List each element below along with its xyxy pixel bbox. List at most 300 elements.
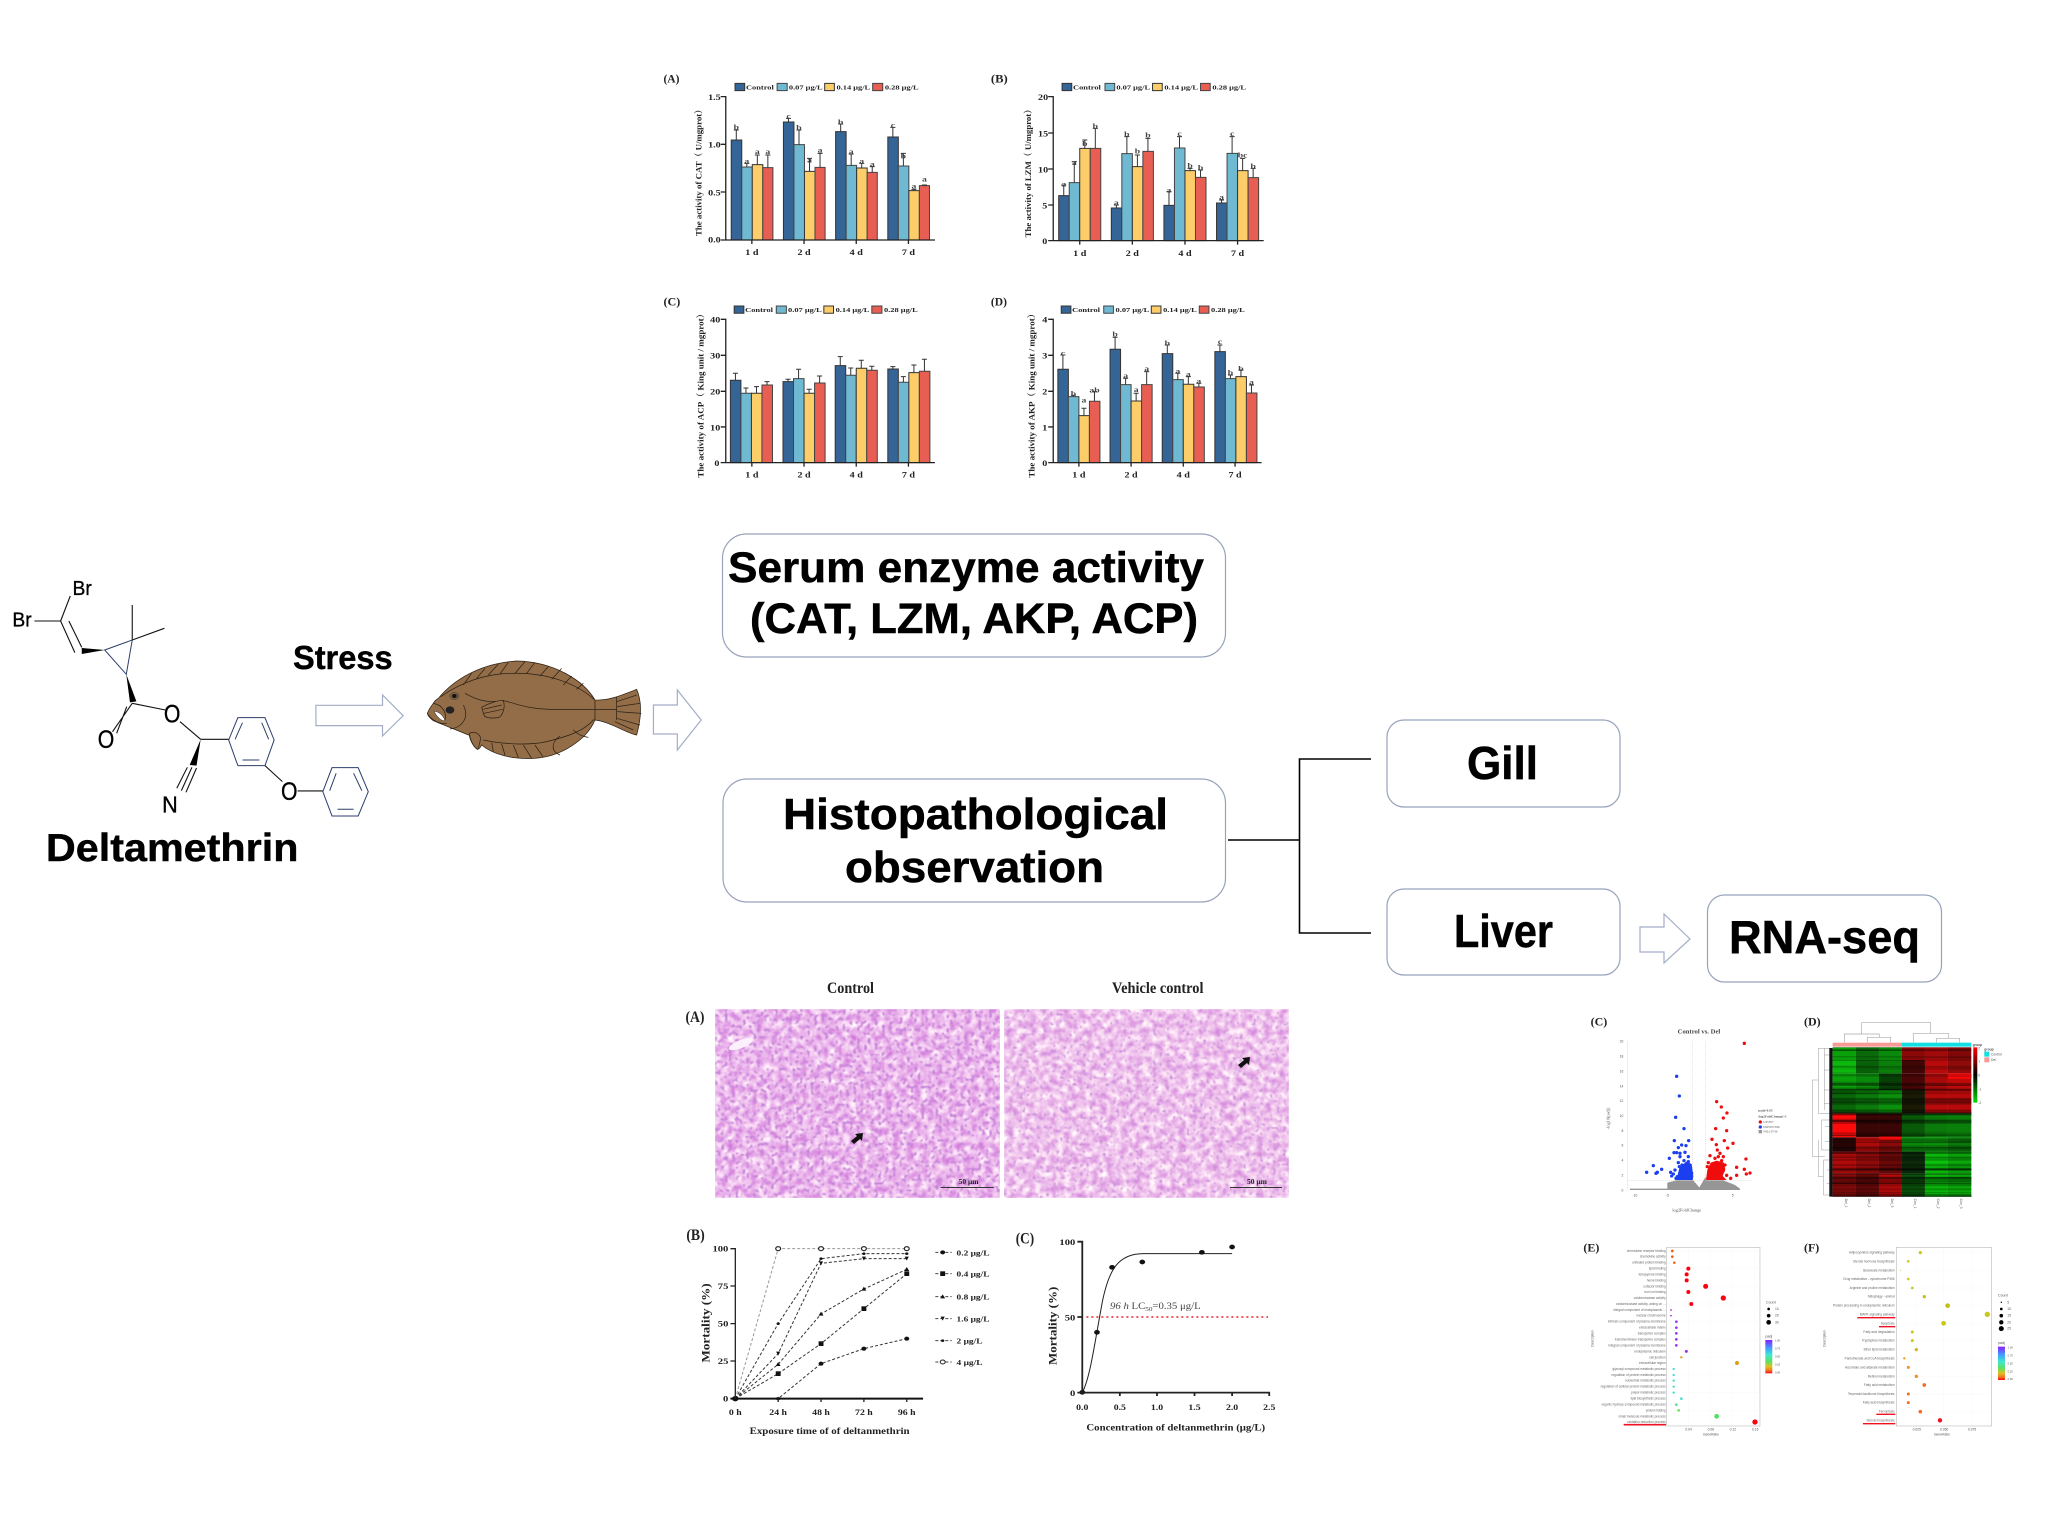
dot plot: KEGG enrichment: Steroid hormone biosynthesis <box>1853 1259 1895 1263</box>
bar chart: LZM activity: 4 d <box>1178 249 1192 258</box>
dot plot: KEGG enrichment: Butanoate metabolism <box>1863 1268 1895 1272</box>
bar chart: ACP activity: Control <box>745 306 773 314</box>
dot plot: GO enrichment: 0.00 <box>1775 1370 1781 1374</box>
dot plot: GO enrichment: 0.12 <box>1730 1427 1736 1431</box>
icon: deltamethrin chemical structure: O <box>164 700 180 728</box>
bar chart: CAT activity: b <box>796 123 802 132</box>
heading: vehicle control: Vehicle control <box>1112 980 1204 997</box>
bar chart: CAT activity: Control <box>746 83 774 91</box>
icon: flounder <box>427 661 641 758</box>
dose-response chart: LC50: 50 <box>1065 1313 1076 1323</box>
volcano plot: -5 <box>1666 1194 1669 1198</box>
bar chart: AKP activity: 7 d <box>1228 471 1242 479</box>
bar chart: CAT activity: a <box>818 146 823 154</box>
volcano plot: 12 <box>1620 1099 1623 1103</box>
bar chart: LZM activity: a <box>1061 180 1067 188</box>
dose-response chart: LC50: 96 h LC <box>1110 1302 1146 1312</box>
bar chart: LZM activity: 20 <box>1038 93 1049 102</box>
dot plot: KEGG enrichment: padj <box>1998 1341 2005 1345</box>
dot plot: GO enrichment: lipid binding <box>1649 1267 1666 1271</box>
dose-response chart: LC50: Mortality (%) <box>1048 1286 1060 1365</box>
heatmap: group <box>1973 1043 1982 1047</box>
bar chart: ACP activity: 30 <box>710 352 721 360</box>
dot plot: GO enrichment: oxidoreductase activity, acting on ... <box>1616 1302 1666 1306</box>
volcano plot: UP:307 <box>1763 1120 1774 1124</box>
dot plot: KEGG enrichment: Fatty acid metabolism <box>1864 1383 1895 1387</box>
dot plot: GO enrichment: 0.50 <box>1775 1355 1781 1359</box>
bar chart: CAT activity: c <box>891 121 895 129</box>
line chart: mortality over time: (B) <box>686 1227 705 1244</box>
panel letter A: (A) <box>686 1009 704 1026</box>
volcano plot: log2FoldChange <box>1672 1208 1701 1213</box>
micrograph: control: 50 μm <box>959 1177 979 1186</box>
bar chart: AKP activity: a <box>1123 371 1129 380</box>
dot plot: KEGG enrichment: 0.75 <box>2008 1354 2013 1358</box>
dot plot: GO enrichment: regulation of cellular protein metabolic process <box>1601 1385 1666 1389</box>
dot plot: KEGG enrichment: 15 <box>2007 1314 2011 1318</box>
bar chart: CAT activity: 1.0 <box>708 141 721 149</box>
dot plot: KEGG enrichment: (F) <box>1804 1241 1819 1255</box>
bar chart: LZM activity: 0.14 μg/L <box>1164 83 1198 91</box>
dot plot: KEGG enrichment: Adipocytokine signaling pathway <box>1849 1251 1895 1255</box>
panel: volcano plot and heatmap <box>1591 1014 2002 1213</box>
legend: concentrations: 2 μg/L <box>957 1336 983 1345</box>
dot plot: KEGG enrichment: Description <box>1823 1330 1827 1347</box>
arrow: fish to assays <box>653 690 701 750</box>
box: serum enzyme activity: (CAT, LZM, AKP, ACP) <box>750 595 1198 643</box>
dot plot: KEGG enrichment: Fatty acid biosynthesis <box>1863 1401 1895 1405</box>
dot plot: GO enrichment: intrinsic component of plasma membrane <box>1608 1320 1666 1324</box>
bar chart: CAT activity: a <box>755 147 760 156</box>
bar chart: AKP activity: (D) <box>991 296 1007 308</box>
bar chart: CAT activity: a <box>807 156 813 164</box>
bar chart: ACP activity: 10 <box>710 423 721 432</box>
bar chart: LZM activity: bc <box>1238 150 1248 159</box>
bar chart: LZM activity: The activity of LZM（ U/mgprot） <box>1023 105 1033 237</box>
bar chart: AKP activity: Control <box>1072 306 1100 314</box>
bar chart: AKP activity: a <box>1186 370 1191 378</box>
line chart: mortality over time: 72 h <box>855 1408 873 1417</box>
bar chart: CAT activity: c <box>786 112 791 120</box>
dot plot: GO enrichment: small molecule metabolic process <box>1618 1414 1666 1418</box>
volcano plot: 10 <box>1620 1114 1623 1118</box>
dot plot: GO enrichment: transporter complex <box>1638 1331 1666 1335</box>
dot plot: GO enrichment: extracellular matrix <box>1639 1326 1666 1330</box>
dose-response chart: LC50 <box>1016 1230 1276 1433</box>
dot plot: GO enrichment <box>1583 1241 1781 1436</box>
bar chart: LZM activity: c <box>1177 129 1182 138</box>
panel: mortality charts <box>686 1227 1276 1437</box>
bar chart: AKP activity: a <box>1249 377 1255 386</box>
bar chart: AKP activity: b <box>1071 389 1076 398</box>
dose-response chart: LC50: 0 <box>1070 1389 1076 1399</box>
heatmap: 0 <box>1978 1074 1980 1078</box>
legend: concentrations: 1.6 μg/L <box>957 1315 990 1323</box>
bar chart: ACP activity: 0.07 μg/L <box>788 306 822 314</box>
bar chart: ACP activity: 0.14 μg/L <box>836 306 869 314</box>
dot plot: KEGG enrichment: 20 <box>2007 1320 2011 1324</box>
bar chart: CAT activity: 1.5 <box>708 93 721 102</box>
dot plot: KEGG enrichment: 0.025 <box>1913 1427 1921 1431</box>
dot plot: GO enrichment: endoplasmic reticulum <box>1634 1349 1666 1353</box>
box: RNA-seq <box>1708 895 1942 982</box>
icon: deltamethrin chemical structure: Br <box>12 608 32 632</box>
panel: enrichment dot plots <box>1583 1241 2013 1436</box>
bar chart: CAT activity: 0.07 μg/L <box>789 83 823 91</box>
bar chart: ACP activity: 40 <box>710 316 721 324</box>
dot plot: KEGG enrichment: Steroid biosynthesis <box>1866 1418 1895 1422</box>
bar chart: AKP activity: ab <box>1089 385 1100 394</box>
bar chart: CAT activity: a <box>870 160 875 168</box>
dot plot: KEGG enrichment: 25 <box>2007 1327 2011 1331</box>
bar chart: LZM activity: 0.28 μg/L <box>1212 83 1246 91</box>
dose-response chart: LC50: 100 <box>1059 1238 1076 1248</box>
line chart: mortality over time: 48 h <box>812 1408 830 1417</box>
line chart: mortality over time: Mortality (%) <box>701 1283 713 1363</box>
dot plot: GO enrichment: Description <box>1590 1330 1594 1347</box>
bar chart: LZM activity: b <box>1187 161 1193 170</box>
bar chart: AKP activity: The activity of AKP（ King unit / mgprot） <box>1027 309 1037 478</box>
bar chart: LZM activity: b <box>1250 161 1256 170</box>
panel: liver histology micrographs <box>686 980 1289 1198</box>
bar chart: LZM activity: (B) <box>991 73 1008 85</box>
bar chart: AKP activity: a <box>1134 385 1139 394</box>
heatmap: 1 <box>1978 1060 1980 1064</box>
bar chart: LZM activity: 5 <box>1042 201 1048 210</box>
bar chart: ACP activity: 1 d <box>745 471 758 479</box>
bar chart: LZM activity: b <box>1082 139 1088 148</box>
dot plot: KEGG enrichment: 0.00 <box>2008 1377 2013 1381</box>
dot plot: GO enrichment: glycosyl compound metabolic process <box>1613 1367 1666 1371</box>
dot plot: KEGG enrichment: 0.50 <box>2008 1361 2013 1365</box>
dot plot: KEGG enrichment: Drug metabolism - cytochrome P450 <box>1843 1277 1895 1281</box>
line chart: mortality over time: 100 <box>712 1245 729 1254</box>
bar chart: AKP activity: c <box>1061 348 1065 357</box>
line chart: mortality over time: 0 <box>723 1394 729 1404</box>
heatmap: Del <box>1991 1058 1996 1062</box>
heatmap: Del_2 <box>1867 1199 1871 1207</box>
label: Deltamethrin: Deltamethrin <box>46 826 298 869</box>
dot plot: GO enrichment: tetrapyrrole binding <box>1639 1272 1666 1276</box>
legend: concentrations: 0.8 μg/L <box>957 1293 990 1301</box>
volcano plot: 6 <box>1621 1144 1623 1148</box>
volcano plot: 2 <box>1621 1174 1623 1178</box>
volcano plot: DOWN:399 <box>1763 1125 1780 1129</box>
dot plot: GO enrichment: chemokine activity <box>1640 1255 1666 1259</box>
bar chart: LZM activity: b <box>1198 163 1203 172</box>
dot plot: GO enrichment: chemokine receptor binding <box>1627 1249 1666 1253</box>
dose-response chart: LC50: =0.35 μg/L <box>1152 1302 1201 1312</box>
volcano plot: NO:10736 <box>1763 1130 1778 1134</box>
dose-response chart: LC50: 0.0 <box>1076 1403 1089 1412</box>
dot plot: KEGG enrichment: 0.075 <box>1968 1427 1976 1431</box>
heatmap: -2 <box>1978 1101 1981 1105</box>
icon: deltamethrin chemical structure: O <box>98 726 114 754</box>
bar chart: CAT activity: a <box>859 156 865 165</box>
bar chart: CAT activity: 1 d <box>745 248 758 257</box>
icon: deltamethrin chemical structure: O <box>281 778 298 806</box>
icon: deltamethrin chemical structure <box>12 577 368 817</box>
bar chart: LZM activity: Control <box>1073 83 1101 91</box>
bar chart: LZM activity: b <box>1124 130 1130 138</box>
bar chart: CAT activity: 0.28 μg/L <box>885 83 919 91</box>
bar chart: LZM activity: a <box>1219 192 1225 201</box>
heatmap <box>1804 1014 2002 1209</box>
dot plot: GO enrichment: lipid biosynthetic process <box>1631 1397 1666 1401</box>
dot plot: GO enrichment: transmembrane transporter complex <box>1615 1337 1666 1341</box>
bar chart: LZM activity: c <box>1230 129 1234 138</box>
box: serum enzyme activity <box>722 534 1226 657</box>
bar chart: AKP activity: 2 <box>1042 388 1048 396</box>
box: histopathological observation: observation <box>845 843 1104 892</box>
bar chart: AKP activity: 0.07 μg/L <box>1116 306 1149 314</box>
bar chart: LZM activity: 7 d <box>1231 249 1244 258</box>
dot plot: KEGG enrichment: MAPK signaling pathway <box>1860 1312 1895 1316</box>
bar chart: CAT activity: a <box>744 156 750 165</box>
dot plot: GO enrichment: nucleotide metabolic process <box>1625 1379 1666 1383</box>
dot plot: KEGG enrichment: Ascorbate and aldarate metabolism <box>1845 1365 1895 1369</box>
bar chart: LZM activity: 15 <box>1038 129 1049 138</box>
volcano plot: 8 <box>1621 1129 1623 1133</box>
bar chart: CAT activity: 0.0 <box>708 236 721 244</box>
volcano plot: -log10(padj) <box>1605 1107 1610 1129</box>
volcano plot: 16 <box>1620 1069 1623 1073</box>
dose-response chart: LC50: 1.5 <box>1188 1403 1201 1412</box>
legend: concentrations: 0.4 μg/L <box>957 1270 990 1278</box>
bar chart: LZM activity: a <box>1072 158 1077 167</box>
volcano plot: 0 <box>1621 1188 1623 1192</box>
line chart: mortality over time: 0 h <box>729 1408 742 1417</box>
bar chart: ACP activity: 20 <box>710 388 721 396</box>
dot plot: KEGG enrichment: Ether lipid metabolism <box>1864 1348 1895 1352</box>
bar chart: CAT activity: The activity of CAT（ U/mgprot） <box>694 105 704 236</box>
dose-response chart: LC50: 0.5 <box>1114 1403 1127 1412</box>
dot plot: GO enrichment: 0.25 <box>1775 1363 1781 1367</box>
bar chart: AKP activity: a <box>1175 366 1181 375</box>
dot plot: KEGG enrichment: Fatty acid degradation <box>1863 1330 1895 1334</box>
bar chart: LZM activity: b <box>1093 121 1098 130</box>
bar chart: LZM activity: b <box>1145 131 1151 139</box>
heatmap: Con_2 <box>1936 1199 1940 1209</box>
dot plot: GO enrichment: 20 <box>1775 1314 1779 1318</box>
bar chart: AKP activity: b <box>1112 330 1118 338</box>
bar chart: LZM activity: 1 d <box>1073 249 1086 258</box>
heatmap: 2 <box>1978 1046 1980 1050</box>
bar chart: CAT activity: a <box>765 147 771 156</box>
dot plot: GO enrichment: 30 <box>1775 1320 1779 1324</box>
dose-response chart: LC50: Concentration of deltanmethrin (μg/L) <box>1086 1423 1266 1433</box>
bar chart: AKP activity: b <box>1238 364 1244 373</box>
icon: deltamethrin chemical structure: N <box>162 792 178 817</box>
dot plot: GO enrichment: extracellular region <box>1639 1361 1666 1365</box>
dot plot: GO enrichment: Count <box>1766 1300 1776 1304</box>
box: liver: Liver <box>1454 905 1553 957</box>
box: gill: Gill <box>1467 737 1538 789</box>
bar chart: CAT activity <box>663 73 935 257</box>
heading: control: Control <box>827 980 874 997</box>
bar chart: AKP activity: a <box>1196 376 1202 385</box>
dot plot: KEGG enrichment: Terpenoid backbone biosynthesis <box>1848 1392 1895 1396</box>
bar chart: LZM activity: 10 <box>1038 165 1049 174</box>
bar chart: AKP activity: 2 d <box>1124 471 1138 479</box>
bar chart: LZM activity: a <box>1167 186 1172 194</box>
dot plot: KEGG enrichment: Mitophagy - animal <box>1868 1295 1895 1299</box>
bar chart: CAT activity: a <box>922 175 928 183</box>
bar chart: CAT activity: 0.14 μg/L <box>836 83 870 91</box>
heatmap: Del_3 <box>1890 1199 1894 1207</box>
connector: histopathology to gill and liver <box>1228 759 1371 933</box>
bar chart: AKP activity: c <box>1218 337 1222 346</box>
dot plot: KEGG enrichment: 10 <box>2007 1307 2011 1311</box>
bar chart: AKP activity: a <box>1082 396 1087 404</box>
bar chart: ACP activity: 2 d <box>797 471 811 479</box>
bar chart: CAT activity: (A) <box>663 73 679 85</box>
legend: concentrations <box>935 1248 990 1367</box>
bar chart: AKP activity: 0.28 μg/L <box>1211 306 1245 314</box>
box: histopathological observation <box>723 779 1226 902</box>
dose-response chart: LC50: 50 <box>1145 1307 1153 1313</box>
bar chart: ACP activity: 0.28 μg/L <box>884 306 918 314</box>
bar chart: CAT activity: 2 d <box>797 248 811 257</box>
dot plot: GO enrichment: iron ion binding <box>1644 1290 1666 1294</box>
volcano plot: |log2FoldChange|>1 <box>1758 1114 1787 1118</box>
volcano plot: (C) <box>1591 1014 1607 1028</box>
dose-response chart: LC50: (C) <box>1016 1230 1034 1247</box>
volcano plot: -10 <box>1633 1194 1637 1198</box>
box: gill <box>1387 720 1620 807</box>
dot plot: GO enrichment: polyol metabolic process <box>1631 1391 1666 1395</box>
volcano plot: 20 <box>1620 1039 1623 1043</box>
dot plot: KEGG enrichment: 5 <box>2007 1300 2009 1304</box>
heatmap: group <box>1984 1047 1994 1051</box>
bar chart: AKP activity: b <box>1165 339 1170 347</box>
dot plot: GO enrichment: unfolded protein binding <box>1632 1261 1666 1265</box>
heatmap: Control <box>1991 1053 2002 1057</box>
bar chart: AKP activity: 0 <box>1042 459 1048 468</box>
bar chart: ACP activity: The activity of ACP（ King unit / mgprot） <box>696 309 706 478</box>
dot plot: KEGG enrichment: Tryptophan metabolism <box>1862 1339 1895 1343</box>
bar chart: AKP activity <box>991 296 1262 479</box>
heatmap: (D) <box>1804 1014 1821 1028</box>
bar chart: LZM activity: 0 <box>1042 237 1048 246</box>
line chart: mortality over time: 25 <box>718 1357 729 1367</box>
micrograph: vehicle control: 50 μm <box>1247 1177 1268 1186</box>
dot plot: KEGG enrichment: 0.25 <box>2008 1369 2013 1373</box>
legend: concentrations: 4 μg/L <box>957 1358 983 1367</box>
dot plot: KEGG enrichment: 1.00 <box>2008 1346 2013 1350</box>
volcano plot: 14 <box>1620 1084 1623 1088</box>
dot plot: GO enrichment: heme binding <box>1647 1278 1666 1282</box>
bar chart: CAT activity: 4 d <box>850 248 863 257</box>
dot plot: GO enrichment: 0.75 <box>1775 1347 1781 1351</box>
icon: deltamethrin chemical structure: Br <box>73 577 92 600</box>
bar chart: LZM activity <box>991 73 1264 258</box>
micrograph: vehicle control <box>1004 1009 1289 1198</box>
line chart: mortality over time: 50 <box>718 1319 729 1329</box>
bar chart: AKP activity: a <box>1144 364 1150 373</box>
bar chart: LZM activity: b <box>1135 147 1140 155</box>
bar chart: ACP activity: 0 <box>714 459 720 468</box>
dose-response chart: LC50: 1.0 <box>1151 1403 1164 1412</box>
bar chart: ACP activity: 7 d <box>902 471 915 479</box>
line chart: mortality over time: 96 h <box>898 1408 916 1417</box>
line chart: mortality over time <box>686 1227 990 1437</box>
dot plot: GO enrichment: padj <box>1765 1334 1772 1338</box>
bar chart: AKP activity: b <box>1228 368 1233 377</box>
dot plot: GO enrichment: oxidation-reduction process <box>1627 1420 1666 1424</box>
dose-response chart: LC50: 2.0 <box>1226 1403 1239 1412</box>
bar chart: LZM activity: 0.07 μg/L <box>1116 83 1150 91</box>
volcano plot <box>1591 1014 1787 1213</box>
bar chart: AKP activity: 4 <box>1042 316 1048 324</box>
bar chart: CAT activity: 7 d <box>902 248 915 257</box>
volcano plot: 18 <box>1620 1054 1623 1058</box>
bar chart: AKP activity: 0.14 μg/L <box>1163 306 1197 314</box>
bar chart: CAT activity: 0.5 <box>708 188 721 197</box>
dot plot: KEGG enrichment <box>1804 1241 2013 1436</box>
dot plot: GO enrichment: 10 <box>1775 1307 1779 1311</box>
volcano plot: 5 <box>1732 1194 1734 1198</box>
dot plot: GO enrichment: organic hydroxy compound metabolic process <box>1601 1403 1666 1407</box>
bar chart: CAT activity: b <box>901 151 906 160</box>
dot plot: KEGG enrichment: Apoptosis <box>1881 1321 1895 1325</box>
bar chart: AKP activity: 4 d <box>1177 471 1190 479</box>
dot plot: GO enrichment: cofactor binding <box>1643 1284 1666 1288</box>
bar chart: AKP activity: 1 <box>1042 423 1048 432</box>
dot plot: GO enrichment: 0.04 <box>1685 1427 1692 1431</box>
line chart: mortality over time: Exposure time of of deltanmethrin <box>750 1427 910 1437</box>
panel: serum enzyme bar charts <box>663 73 1264 479</box>
dot plot: GO enrichment: (E) <box>1583 1241 1599 1255</box>
dot plot: KEGG enrichment: Pantothenate and CoA biosynthesis <box>1845 1356 1895 1360</box>
dot plot: KEGG enrichment: Arginine and proline metabolism <box>1850 1286 1895 1290</box>
dot plot: KEGG enrichment: GeneRatio <box>1934 1432 1950 1436</box>
line chart: mortality over time: 75 <box>718 1282 729 1292</box>
bar chart: ACP activity: (C) <box>663 296 680 308</box>
box: serum enzyme activity: Serum enzyme activity <box>728 544 1204 592</box>
dot plot: KEGG enrichment: Ferroptosis <box>1879 1410 1895 1414</box>
heatmap: -1 <box>1978 1087 1981 1091</box>
bar chart: CAT activity: a <box>849 147 854 156</box>
heatmap: Del_1 <box>1844 1199 1848 1207</box>
bar chart: ACP activity: 4 d <box>850 471 863 479</box>
dot plot: GO enrichment: GeneRatio <box>1703 1432 1719 1436</box>
box: liver <box>1387 889 1620 975</box>
dot plot: GO enrichment: nuclear chromosome <box>1636 1314 1666 1318</box>
panel: deltamethrin molecule and stress arrow <box>12 577 701 869</box>
arrow: liver to RNA-seq <box>1640 914 1690 963</box>
dot plot: GO enrichment: cell junction <box>1649 1355 1666 1359</box>
volcano plot: Control vs. Del <box>1678 1028 1720 1035</box>
heatmap: Con_1 <box>1913 1199 1917 1209</box>
dot plot: KEGG enrichment: Count <box>1998 1294 2008 1298</box>
bar chart: CAT activity: b <box>838 118 844 126</box>
dot plot: KEGG enrichment: 0.050 <box>1940 1427 1948 1431</box>
dot plot: GO enrichment: integral component of plasma membrane <box>1608 1343 1666 1347</box>
dot plot: GO enrichment: protein folding <box>1646 1408 1666 1412</box>
dot plot: GO enrichment: oxidoreductase activity <box>1634 1296 1666 1300</box>
bar chart: CAT activity: b <box>734 122 739 131</box>
micrograph: control <box>715 1009 1000 1198</box>
dot plot: KEGG enrichment: Retinol metabolism <box>1868 1374 1895 1378</box>
label: Stress: Stress <box>293 639 393 676</box>
volcano plot: 4 <box>1621 1159 1623 1163</box>
dot plot: GO enrichment: 0.08 <box>1708 1427 1714 1431</box>
arrow: stress to fish <box>316 695 403 736</box>
box: histopathological observation: Histopathological <box>783 790 1168 839</box>
dose-response chart: LC50: 2.5 <box>1263 1403 1276 1412</box>
bar chart: AKP activity: 1 d <box>1072 471 1085 479</box>
